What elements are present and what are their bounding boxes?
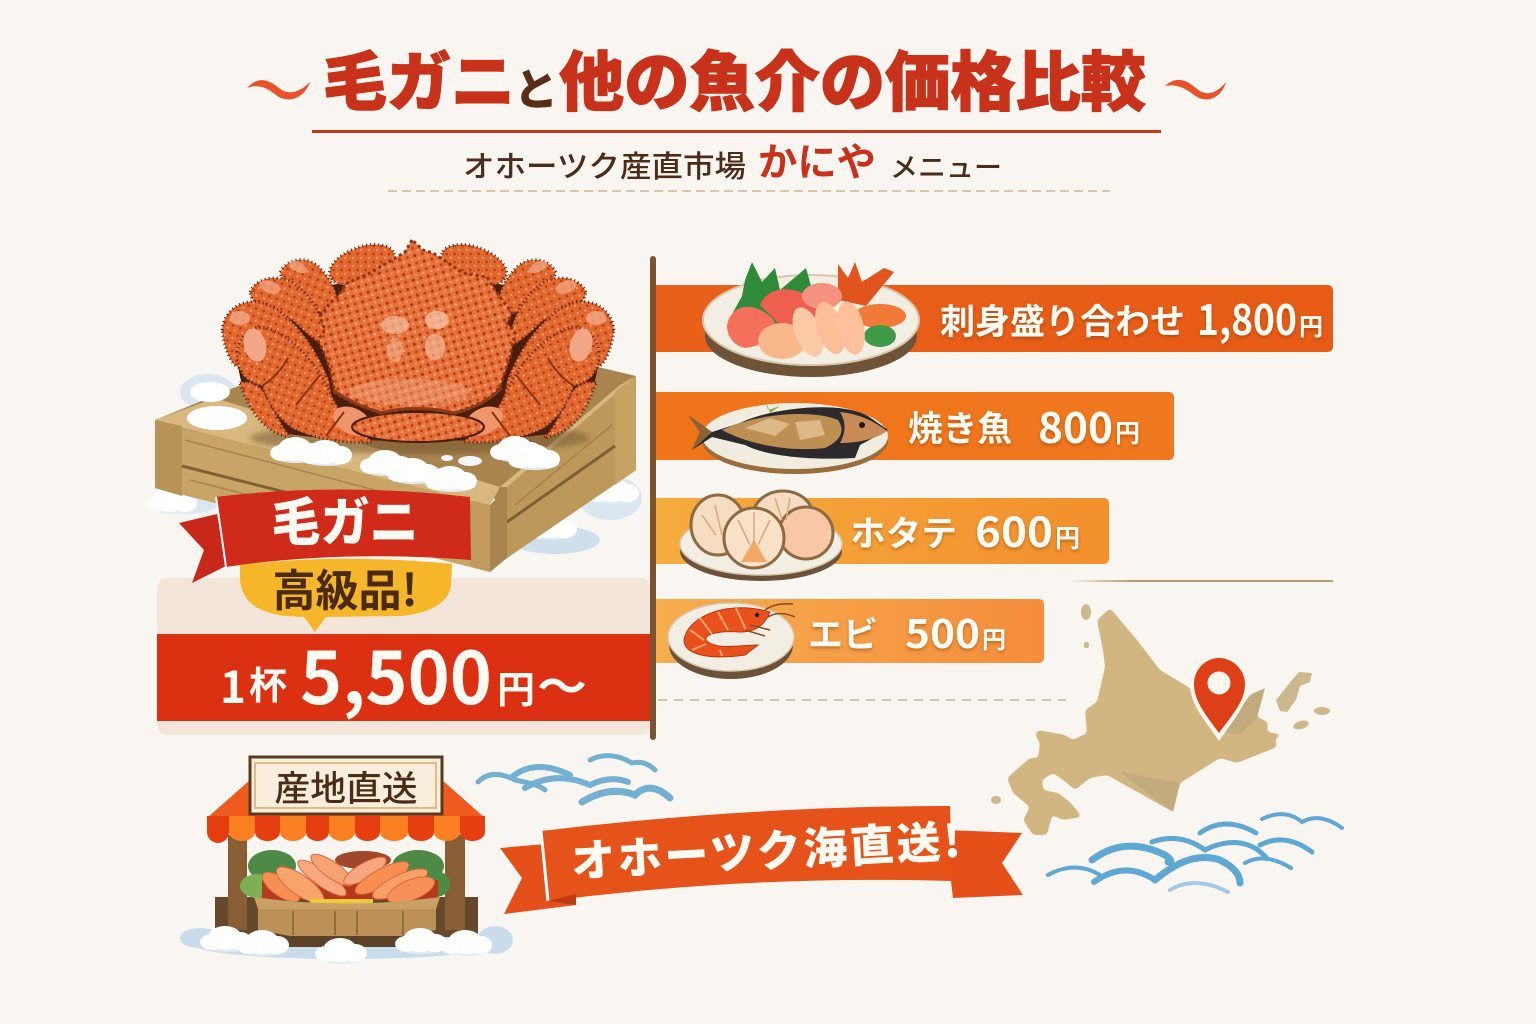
bar: grilled fish [656, 392, 1174, 474]
illustration: market stall [180, 757, 513, 964]
chart axis [650, 256, 656, 740]
bar label scallops [850, 499, 1080, 559]
stall counter back [215, 897, 478, 937]
subtitle: オホーツク産直市場 [463, 142, 746, 186]
map islands [991, 604, 1330, 804]
map landmass [1007, 608, 1285, 835]
stall posts [228, 835, 247, 930]
snow on crate [187, 382, 560, 492]
illustration: crab on wooden crate with snow [145, 236, 642, 572]
bar label sashimi: 刺身盛り合わせ [940, 294, 1185, 345]
subtitle [463, 132, 1002, 188]
banner fold [548, 894, 576, 905]
bar: sashimi [656, 262, 1333, 377]
snow under crate [145, 374, 642, 554]
icon: shrimp plate [668, 603, 795, 679]
stall snow piles [200, 926, 492, 964]
stall roof [207, 780, 485, 843]
subtitle: かにや [758, 132, 876, 188]
divider above map [1066, 580, 1333, 582]
icon: sashimi plate [703, 262, 919, 377]
price text: 円 [497, 659, 535, 714]
icon: scallop plate [680, 491, 842, 581]
bar label scallops: 円 [1055, 519, 1080, 555]
stall sign [250, 757, 442, 814]
stall snow base [180, 926, 513, 959]
banner left tail [500, 844, 576, 914]
bar label grilled fish: 800 [1038, 395, 1113, 456]
banner text: オホーツク海直送! [569, 806, 962, 890]
banner body [541, 806, 952, 901]
bar label shrimp: 円 [982, 620, 1006, 655]
price text: 杯 [249, 655, 287, 710]
bar label sashimi [940, 287, 1323, 348]
title text: と [514, 54, 558, 118]
bar label grilled fish: 円 [1115, 414, 1140, 450]
bar label grilled fish: 焼き魚 [908, 401, 1012, 452]
panel background [157, 578, 652, 735]
map: Hokkaido with location pin [991, 604, 1330, 835]
title text: 他の魚介の価格比較 [559, 30, 1146, 124]
banner right tail [945, 830, 1023, 898]
ribbon tail [179, 514, 228, 583]
bar: shrimp [656, 599, 1044, 679]
icon: location pin [1190, 655, 1248, 741]
stall sign: 産地直送 [274, 761, 418, 812]
bar label scallops: ホタテ [850, 506, 957, 557]
title flourish left [247, 80, 310, 99]
title block [247, 30, 1226, 133]
title flourish right [1165, 80, 1226, 99]
ribbon label: 毛ガニ [272, 481, 418, 556]
red price band [157, 634, 651, 721]
crab [222, 236, 614, 442]
bar label scallops: 600 [975, 499, 1053, 559]
icon: right waves [1048, 814, 1342, 892]
stall basket [254, 897, 440, 936]
price text: 5,500 [300, 620, 492, 725]
subtitle: メニュー [890, 146, 1002, 185]
bar label sashimi: 円 [1299, 307, 1323, 342]
banner: Okhotsk Sea direct delivery [500, 806, 1023, 914]
panel: price panel [157, 578, 652, 735]
callout: premium [240, 555, 452, 632]
wooden crate [155, 320, 636, 572]
bar: scallops [656, 491, 1109, 581]
stall seafood [240, 849, 450, 909]
title underline [312, 130, 1161, 133]
title text: 毛ガニ [323, 32, 515, 124]
price text: 〜 [537, 651, 587, 717]
price text: 1 [220, 652, 246, 716]
bar label grilled fish [908, 395, 1140, 456]
bar label sashimi: 1,800 [1197, 287, 1297, 348]
ribbon body [215, 490, 471, 567]
bar label shrimp [808, 604, 1006, 660]
callout: premium: 高級品! [272, 555, 418, 619]
crate shadow [250, 422, 590, 454]
bar label shrimp: 500 [905, 604, 980, 660]
map shading [1120, 688, 1265, 812]
ribbon: crab name [179, 481, 471, 583]
bar label shrimp: エビ [808, 607, 878, 658]
icon: grilled fish plate [688, 395, 888, 474]
price text [220, 620, 587, 725]
icon: upper waves [478, 756, 670, 802]
